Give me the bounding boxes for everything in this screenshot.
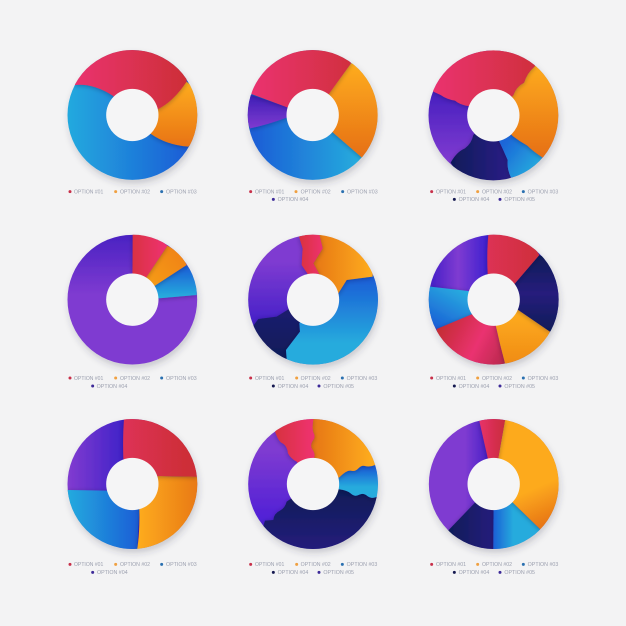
legend [249,562,377,576]
panel: donut chart 3 [426,50,563,201]
donut hole [287,458,339,510]
segment: navy [514,254,559,334]
legend item 01: OPTION #01 [74,189,103,195]
legend item 02: OPTION #02 [120,376,150,382]
legend [249,189,378,203]
legend item 02: OPTION #02 [482,376,512,382]
segment: orange [311,415,376,484]
clipped overlay segments [248,50,378,160]
clipped overlay segments [448,417,580,550]
panel: donut chart 4 [67,234,197,390]
segment: red [275,418,315,484]
legend item 03: OPTION #03 [528,376,558,382]
segment: purple [428,50,558,180]
segment: blue [498,134,542,178]
legend item 04: OPTION #04 [459,384,489,390]
legend item 03: OPTION #03 [347,189,378,195]
legend [430,189,558,203]
panel: donut chart 8 [248,415,379,576]
donut 1 [67,27,202,180]
donut 7 [57,402,214,565]
segment: navy [448,484,494,550]
legend item 03: OPTION #03 [166,562,197,568]
segment: purple [248,419,378,549]
segment: purple [429,419,558,549]
legend [249,376,377,390]
legend item 01: OPTION #01 [74,562,103,568]
legend [68,562,197,576]
legend item 04: OPTION #04 [97,570,128,576]
legend item 01: OPTION #01 [436,189,466,195]
panel: donut chart 5 [248,234,390,390]
segment: purple [429,235,558,364]
legend item 01: OPTION #01 [436,562,466,568]
legend item 01: OPTION #01 [255,189,284,195]
segment: blue [154,265,197,302]
legend item 04: OPTION #04 [97,384,127,390]
legend item 02: OPTION #02 [482,562,512,568]
legend item 04: OPTION #04 [278,197,308,203]
donut hole [286,89,339,141]
panel: donut chart 2 [246,50,382,201]
donut 3 [426,50,563,188]
donut hole [287,273,339,326]
segment: blue [67,50,197,180]
clipped overlay segments [263,415,379,570]
clipped overlay segments [74,50,198,150]
segment: orange [494,417,580,529]
panel: donut chart 1 [66,50,202,194]
segment: purple [248,94,288,131]
legend item 05: OPTION #05 [504,197,535,203]
legend item 03: OPTION #03 [166,376,197,382]
segment: red [298,234,324,274]
segment: red [479,419,505,484]
legend item 02: OPTION #02 [482,189,512,195]
segment: purple [248,235,378,364]
donut hole [106,458,158,510]
legend item 05: OPTION #05 [323,384,354,390]
segment: orange [328,63,378,160]
segment: orange [132,476,214,559]
segment: purple [67,235,197,364]
segment: blue [286,274,378,365]
legend item 02: OPTION #02 [301,189,331,195]
donut 8 [248,415,379,570]
donut hole [467,458,520,510]
legend item 01: OPTION #01 [436,376,466,382]
legend item 02: OPTION #02 [120,562,150,568]
clipped overlay segments [57,402,214,565]
donut hole [467,89,519,141]
legend [430,562,558,576]
segment: blue [428,286,472,330]
donut 9 [429,417,580,550]
segment: red [123,402,207,484]
legend item 01: OPTION #01 [74,376,103,382]
segment: red [432,50,536,110]
legend item 02: OPTION #02 [301,376,331,382]
segment: orange [313,234,373,300]
clipped overlay segments [432,50,558,180]
segment: purple [67,419,197,549]
legend item 03: OPTION #03 [347,562,377,568]
segment: navy [449,132,511,180]
segment: red [250,50,353,110]
clipped overlay segments [428,234,559,365]
legend [68,189,197,195]
legend item 02: OPTION #02 [301,562,331,568]
donut 6 [427,233,569,371]
donut hole [467,273,520,326]
segment: orange [148,82,198,150]
segment: crimson [436,313,505,365]
segment: orange [493,310,550,364]
segment: red [485,234,540,284]
donut 4 [67,234,197,364]
legend item 03: OPTION #03 [528,562,558,568]
legend item 01: OPTION #01 [255,562,284,568]
segment: blue [248,50,377,180]
legend item 05: OPTION #05 [323,570,354,576]
segment: navy [253,308,300,359]
panel: donut chart 7 [66,419,202,574]
legend item 05: OPTION #05 [504,570,535,576]
donut 5 [248,234,390,377]
segment: navy [263,484,379,570]
legend item 04: OPTION #04 [459,570,489,576]
legend item 03: OPTION #03 [347,376,377,382]
segment: blue [57,484,139,565]
legend [430,376,558,390]
donut 2 [246,50,382,187]
legend item 03: OPTION #03 [166,189,197,195]
segment: orange [509,66,558,160]
donut hole [106,89,158,141]
clipped overlay segments [132,234,197,300]
segment: orange [146,246,188,288]
clipped overlay segments [253,234,378,365]
legend item 04: OPTION #04 [278,384,308,390]
panel: donut chart 6 [427,233,569,390]
legend item 04: OPTION #04 [459,197,489,203]
legend item 05: OPTION #05 [504,384,535,390]
segment: red [74,50,188,112]
panel: donut chart 9 [429,417,580,576]
legend item 04: OPTION #04 [278,570,308,576]
legend item 01: OPTION #01 [255,376,284,382]
legend item 03: OPTION #03 [528,189,558,195]
segment: blue [493,484,540,550]
segment: red [130,234,169,279]
donut hole [106,273,158,326]
segment: blue [313,465,379,498]
legend [68,376,197,390]
legend item 02: OPTION #02 [120,189,150,195]
